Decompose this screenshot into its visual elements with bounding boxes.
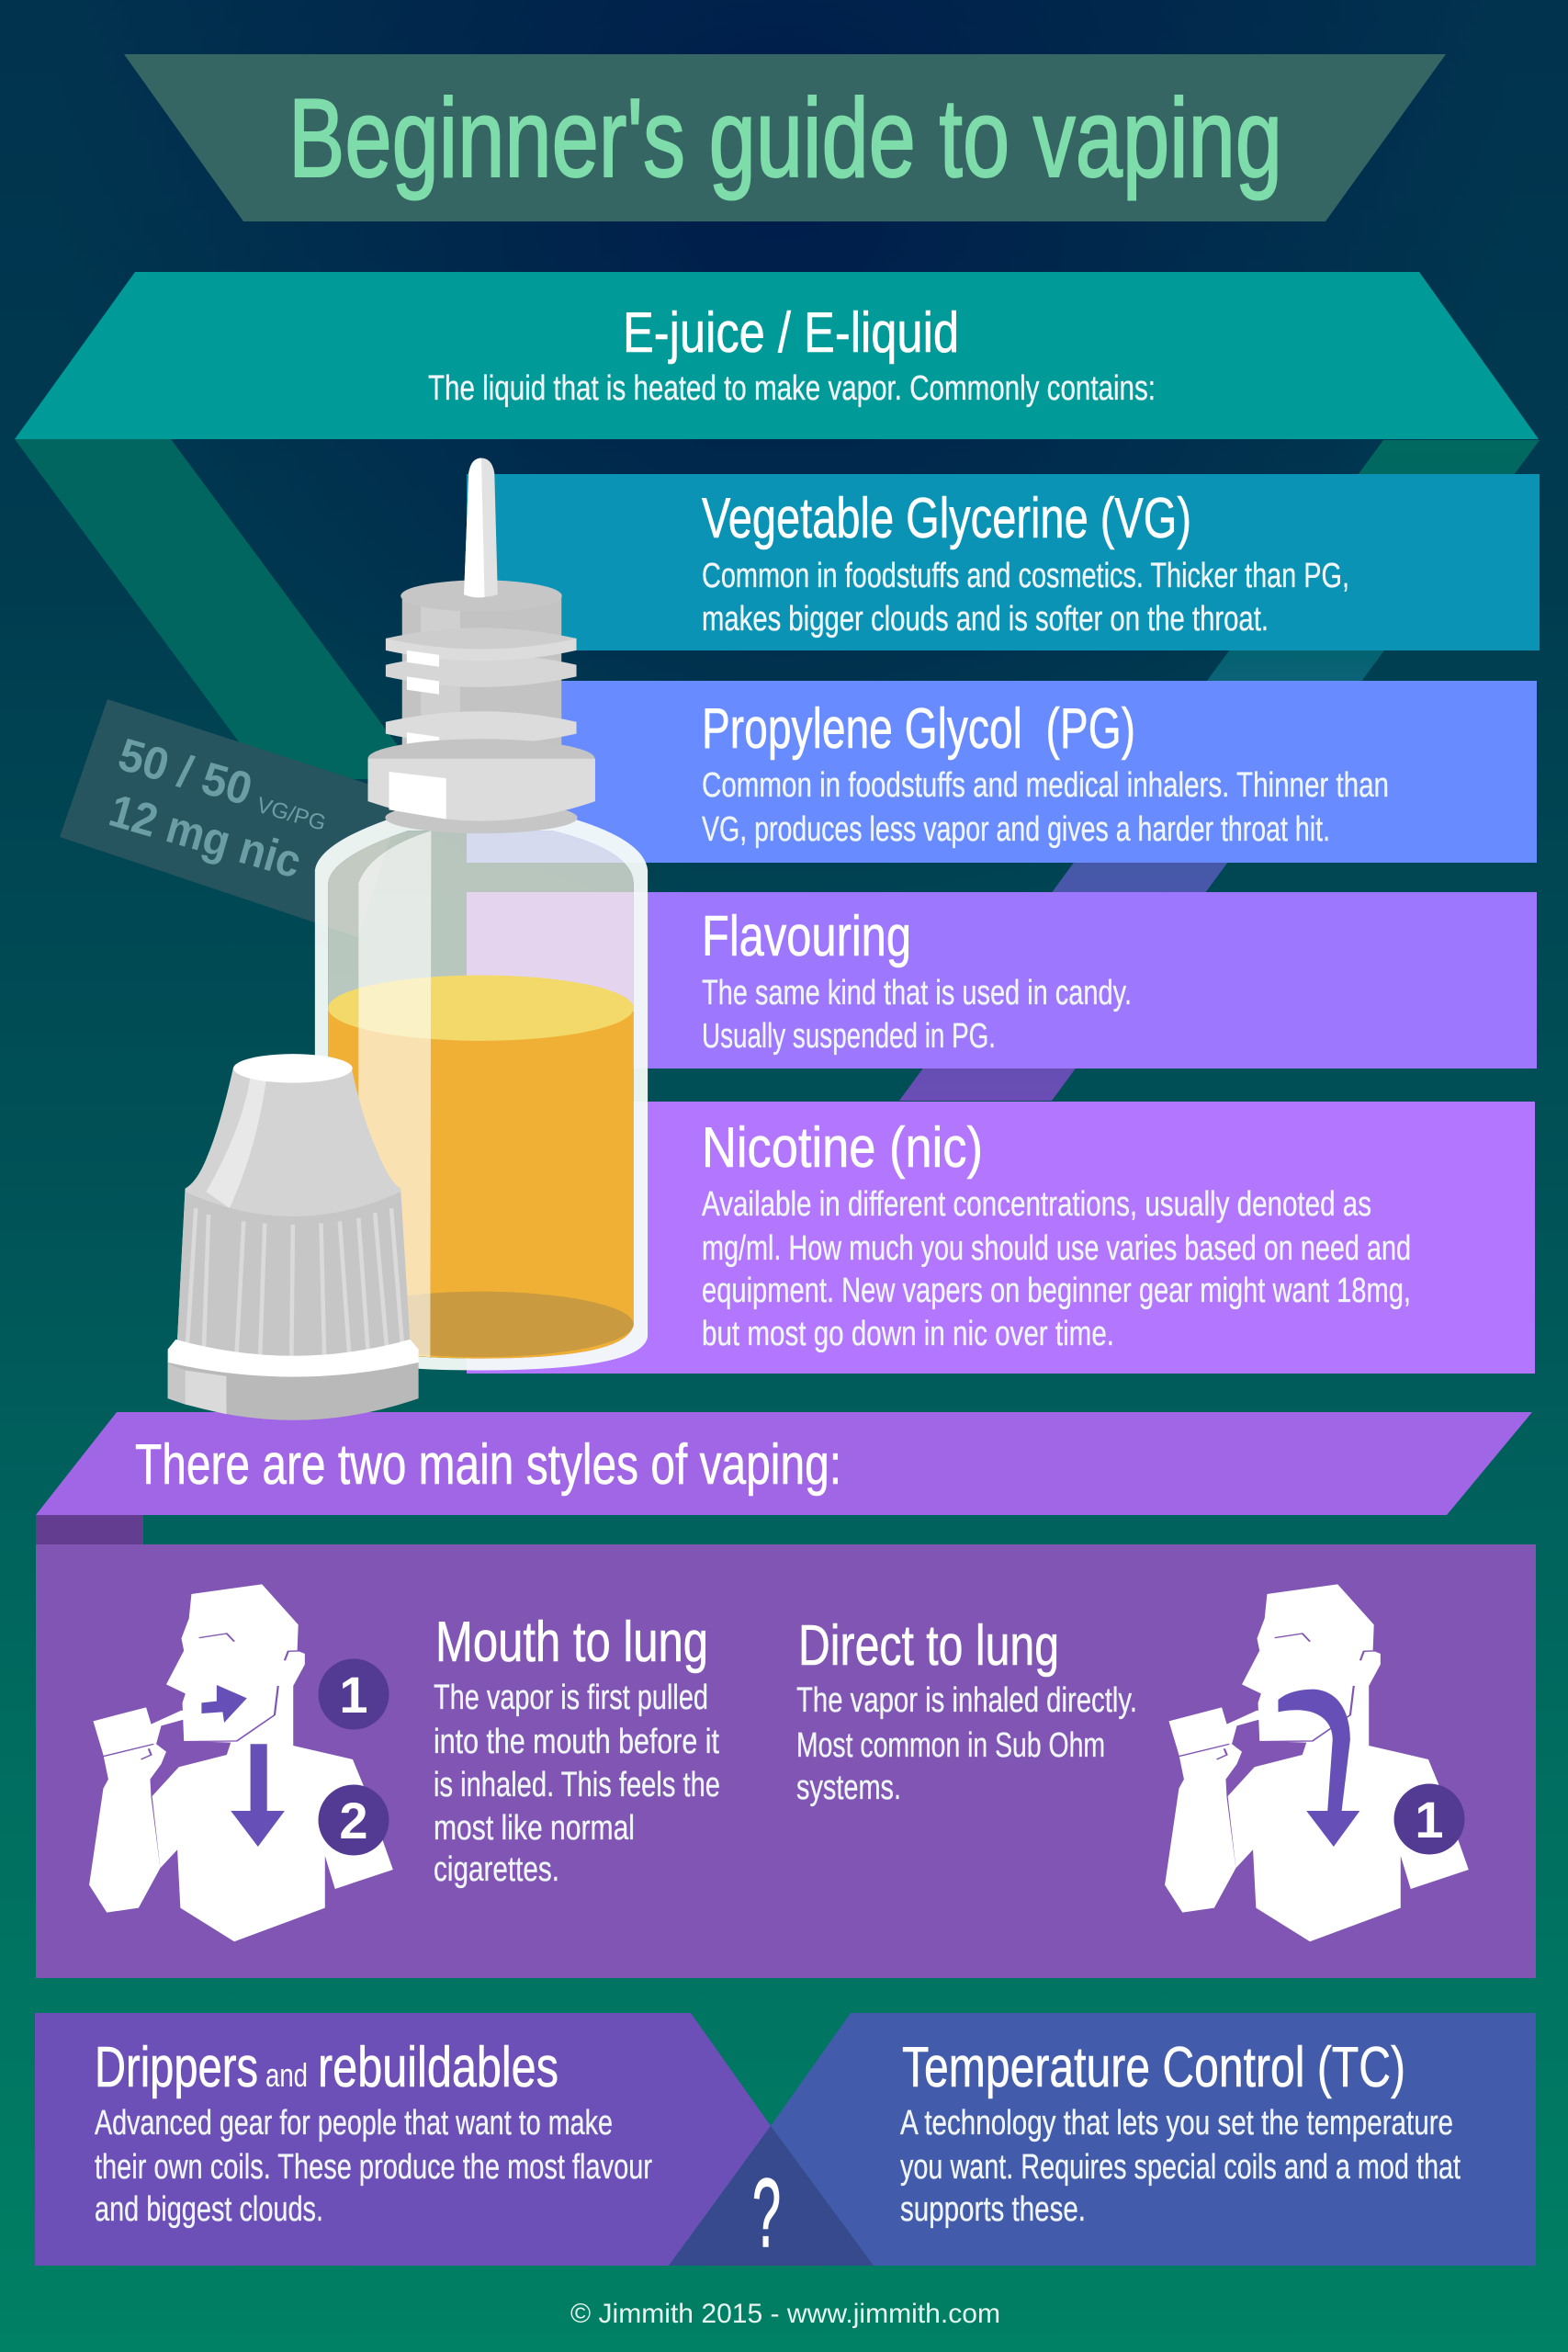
liquid bottom shade (328, 1292, 634, 1357)
label ratio text: 50 / 50 (113, 729, 258, 815)
panel: drippers and rebuildables (35, 2013, 771, 2266)
thread ring 2 (386, 654, 577, 687)
bottle neck (402, 594, 561, 752)
drippers line 2: their own coils. These produce the most flavour (95, 2148, 652, 2187)
nicotine heading: Nicotine (nic) (702, 1116, 983, 1180)
pg text line 1: Common in foodstuffs and medical inhalers. Thinner than (702, 766, 1389, 805)
mouth to lung heading: Mouth to lung (435, 1611, 708, 1674)
direct to lung line 3: systems. (796, 1769, 901, 1807)
step 1 number: 1 (339, 1666, 368, 1724)
nicotine text line 4: but most go down in nic over time. (702, 1315, 1114, 1353)
neck top (400, 580, 562, 612)
collar highlight (389, 772, 446, 819)
arrow: curved to lung (1278, 1690, 1359, 1847)
drippers heading joiner: and (265, 2056, 308, 2094)
question mark triangle (669, 2126, 874, 2267)
panel: propylene glycol (467, 681, 1537, 863)
step 2 circle (318, 1784, 389, 1856)
collar body (368, 759, 595, 821)
panel: flavouring (467, 892, 1537, 1069)
step 2 number: 2 (339, 1792, 368, 1849)
arrow: into mouth (201, 1685, 247, 1723)
cap top (233, 1054, 353, 1083)
cap cone (177, 1067, 410, 1342)
drippers line 1: Advanced gear for people that want to make (95, 2104, 613, 2143)
mouth to lung line 1: The vapor is first pulled (434, 1679, 708, 1717)
title: Beginner's guide to vaping (288, 75, 1282, 200)
e-juice heading: E-juice / E-liquid (623, 301, 959, 365)
label nicotine text: 12 mg nic (104, 785, 307, 888)
styles banner (36, 1412, 1532, 1515)
banner fold tab (36, 1515, 143, 1544)
e-juice banner (15, 272, 1539, 439)
panel: temperature control (771, 2013, 1536, 2266)
body silhouette (152, 1584, 393, 1941)
bottle glass interior (328, 831, 634, 1329)
icon: bottle cap (168, 1054, 419, 1420)
footer credit: © Jimmith 2015 - www.jimmith.com (570, 2299, 1000, 2329)
rebuildables heading: rebuildables (318, 2036, 558, 2099)
nicotine text line 1: Available in different concentrations, usually denoted as (702, 1185, 1371, 1224)
liquid surface (328, 975, 634, 1041)
icon: person mouth to lung (89, 1584, 393, 1941)
tc line 3: supports these. (900, 2190, 1086, 2229)
face lines (1179, 1634, 1381, 1759)
step 1 circle right (1394, 1784, 1464, 1854)
body silhouette (1228, 1584, 1469, 1941)
neck highlight (421, 601, 460, 752)
panel: nicotine (467, 1102, 1535, 1374)
right diagonal stripe (899, 440, 1540, 1101)
drippers heading: Drippers (95, 2036, 258, 2099)
collar lower lip (385, 802, 578, 833)
icon: person direct to lung (1165, 1584, 1469, 1941)
mouth to lung line 2: into the mouth before it (434, 1723, 719, 1761)
arm silhouette (89, 1707, 190, 1913)
title banner (124, 54, 1446, 221)
cap ribbed band (177, 1192, 410, 1363)
arm silhouette (1165, 1707, 1266, 1913)
cap base light band (186, 1370, 226, 1414)
arrow: down to lung (231, 1744, 285, 1847)
liquid (328, 1012, 634, 1359)
thread highlights (407, 650, 439, 749)
glass highlight (358, 831, 431, 1357)
nozzle highlight (464, 458, 485, 597)
thread ring 1 (386, 628, 577, 661)
flavouring text line 1: The same kind that is used in candy. (702, 974, 1132, 1012)
mouth to lung line 3: is inhaled. This feels the (434, 1766, 720, 1804)
question mark: ? (752, 2159, 781, 2267)
pg heading: Propylene Glycol (PG) (702, 697, 1135, 761)
vg text line 2: makes bigger clouds and is softer on the throat. (702, 600, 1269, 639)
cap white ring (168, 1340, 419, 1377)
cap highlight (206, 1074, 267, 1208)
thread ring 3 (386, 711, 577, 744)
pg text line 2: VG, produces less vapor and gives a harder throat hit. (702, 810, 1330, 849)
direct to lung line 1: The vapor is inhaled directly. (796, 1681, 1137, 1720)
nozzle (464, 458, 498, 597)
direct to lung heading: Direct to lung (798, 1614, 1059, 1678)
mouth to lung line 5: cigarettes. (434, 1850, 559, 1889)
cap ribs (187, 1208, 402, 1356)
direct to lung line 2: Most common in Sub Ohm (796, 1726, 1105, 1765)
tc heading: Temperature Control (TC) (902, 2036, 1405, 2099)
flavouring text line 2: Usually suspended in PG. (702, 1017, 996, 1056)
left diagonal stripe (15, 439, 423, 779)
cap base (168, 1363, 419, 1420)
panel: vegetable glycerine (467, 474, 1540, 650)
step 1 number right: 1 (1415, 1791, 1444, 1849)
styles heading: There are two main styles of vaping: (135, 1433, 841, 1497)
collar top (368, 739, 594, 778)
icon: e-liquid bottle (315, 458, 648, 1370)
bottle glass edge (315, 819, 648, 1370)
step 1 circle (318, 1659, 389, 1729)
bottle label (60, 699, 404, 937)
label vg pg text: VG/PG (254, 793, 329, 836)
face lines (103, 1634, 305, 1759)
ring 1 face (386, 628, 577, 649)
flavouring heading: Flavouring (702, 905, 911, 968)
cap base left (168, 1363, 186, 1405)
e-juice description: The liquid that is heated to make vapor. Commonly contains: (428, 369, 1156, 408)
mouth to lung line 4: most like normal (434, 1809, 635, 1848)
drippers line 3: and biggest clouds. (95, 2190, 323, 2229)
vg text line 1: Common in foodstuffs and cosmetics. Thicker than PG, (702, 557, 1349, 595)
panel: two styles of vaping (36, 1544, 1536, 1978)
vg heading: Vegetable Glycerine (VG) (702, 487, 1191, 550)
